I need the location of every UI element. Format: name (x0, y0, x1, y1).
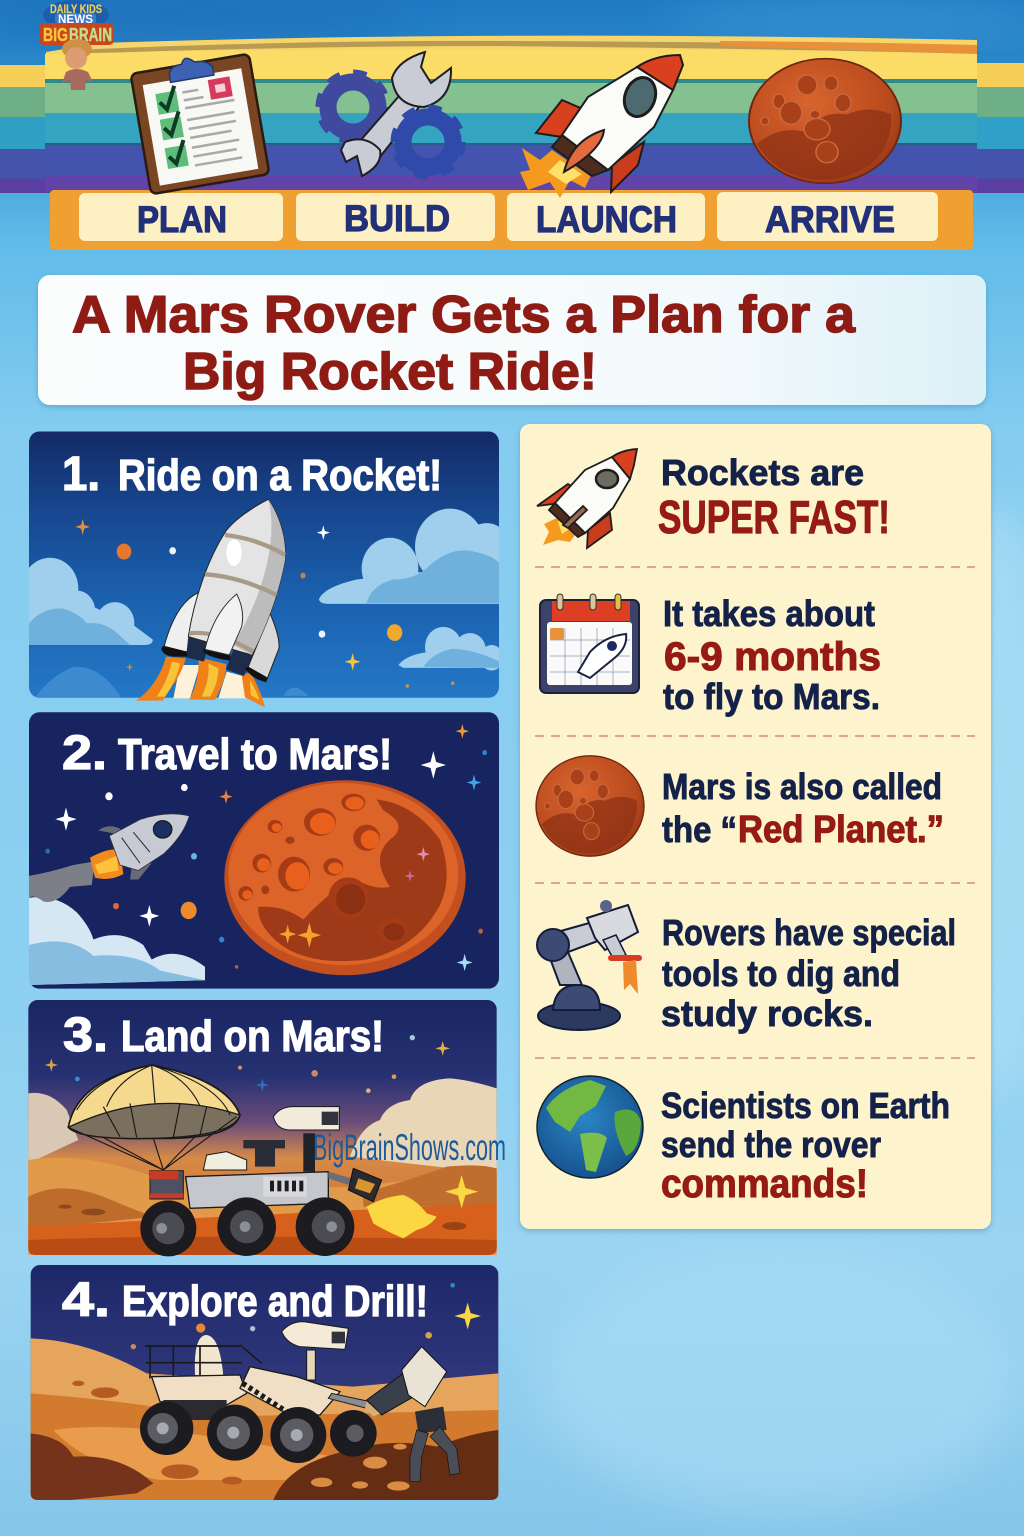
logo: daily kids news with big brain: NEWS (58, 12, 93, 26)
stars (75, 519, 454, 688)
icon: mars (536, 756, 644, 856)
heading: step 1: Ride on a Rocket! (118, 451, 442, 500)
rover (140, 1322, 377, 1463)
label: launch (507, 193, 705, 241)
panel: step 1 ride on a rocket (22, 432, 512, 707)
banner rainbow stripes (45, 36, 977, 192)
logo: daily kids news with big brain: DAILY KIDS (50, 2, 102, 16)
heading: step 1: 1. (62, 448, 100, 501)
banner side tabs (0, 63, 1024, 193)
fact: super fast (537, 449, 890, 548)
label: arrive: ARRIVE (765, 199, 895, 240)
fact text: SUPER FAST! (658, 491, 890, 543)
fact: earth commands (537, 1076, 950, 1206)
icon: planet mars (749, 59, 901, 183)
label: launch: LAUNCH (536, 199, 677, 240)
watermark: BigBrainShows.com (313, 1127, 506, 1168)
icon: earth (537, 1076, 643, 1178)
fact text (661, 1085, 950, 1206)
heading: step 4: 4. (62, 1274, 110, 1327)
fact text (663, 593, 881, 717)
label: plan: PLAN (137, 199, 227, 240)
logo: daily kids news with big brain: BRAIN (69, 25, 112, 45)
clouds (28, 1078, 497, 1173)
header banner (0, 36, 1024, 250)
fact text (658, 452, 890, 543)
heading: step 2: 2. (62, 727, 107, 780)
heading: step 2 (62, 727, 392, 780)
heading: step 3: Land on Mars! (121, 1012, 384, 1061)
panel: step 2 travel to mars (29, 712, 499, 989)
flying rocket (29, 814, 189, 902)
fact text: send the rover (661, 1124, 881, 1165)
exhaust flame (367, 1195, 437, 1238)
title line 2: Big Rocket Ride! (183, 343, 597, 401)
ground (28, 1158, 497, 1255)
banner label strip (50, 190, 973, 250)
heading: step 3: 3. (63, 1009, 108, 1062)
panel: step 3 land on mars (28, 1000, 506, 1256)
stars (45, 724, 487, 971)
fact text (662, 766, 944, 851)
fact text: Red Planet.” (738, 809, 944, 851)
label: arrive (717, 192, 938, 241)
clouds (22, 509, 512, 698)
fact text: Rovers have special (662, 912, 956, 953)
stars (45, 1035, 478, 1208)
icon: calendar with rocket (540, 594, 639, 693)
icon: clipboard (130, 48, 269, 194)
drill arm (365, 1347, 460, 1482)
fact text: Mars is also called (662, 766, 942, 807)
fact text: commands! (661, 1162, 868, 1206)
panel: step 4 explore and drill (31, 1265, 498, 1500)
heading: step 3 (63, 1009, 384, 1062)
stars (131, 1283, 481, 1349)
fact text: Rockets are (661, 452, 864, 493)
heading: step 4 (62, 1274, 428, 1327)
label: build: BUILD (344, 198, 450, 239)
title line 1: A Mars Rover Gets a Plan for a (72, 286, 856, 344)
heading: step 2: Travel to Mars! (118, 730, 392, 779)
parachute (68, 1065, 240, 1199)
fact text: to fly to Mars. (663, 676, 880, 717)
fact text: 6-9 months (664, 635, 881, 679)
fact text: study rocks. (661, 993, 873, 1034)
heading: step 4: Explore and Drill! (122, 1277, 428, 1326)
label: build (296, 193, 495, 241)
icon: gears and wrench (320, 52, 461, 176)
fact text: Scientists on Earth (661, 1085, 950, 1126)
title panel (38, 275, 986, 405)
cloud (29, 897, 205, 985)
fact text: the “ (662, 809, 737, 850)
fact: rover tools (537, 900, 956, 1034)
icon: rocket (537, 449, 637, 548)
panel: rocket facts (520, 424, 991, 1229)
rocket with flames (136, 499, 285, 707)
fact text: It takes about (663, 593, 875, 634)
logo: daily kids news with big brain: BIG (43, 25, 68, 45)
icon: robot arm (537, 900, 642, 1030)
fact: travel time (540, 593, 881, 717)
label: plan (79, 193, 283, 241)
icon: launch rocket (520, 55, 683, 198)
fact text (661, 912, 956, 1034)
terrain (31, 1338, 498, 1500)
fact: red planet (536, 756, 944, 856)
planet (224, 780, 466, 975)
mascot (62, 39, 93, 90)
rover (140, 1107, 382, 1256)
fact text: tools to dig and (662, 953, 900, 994)
logo: daily kids news with big brain (39, 0, 114, 90)
